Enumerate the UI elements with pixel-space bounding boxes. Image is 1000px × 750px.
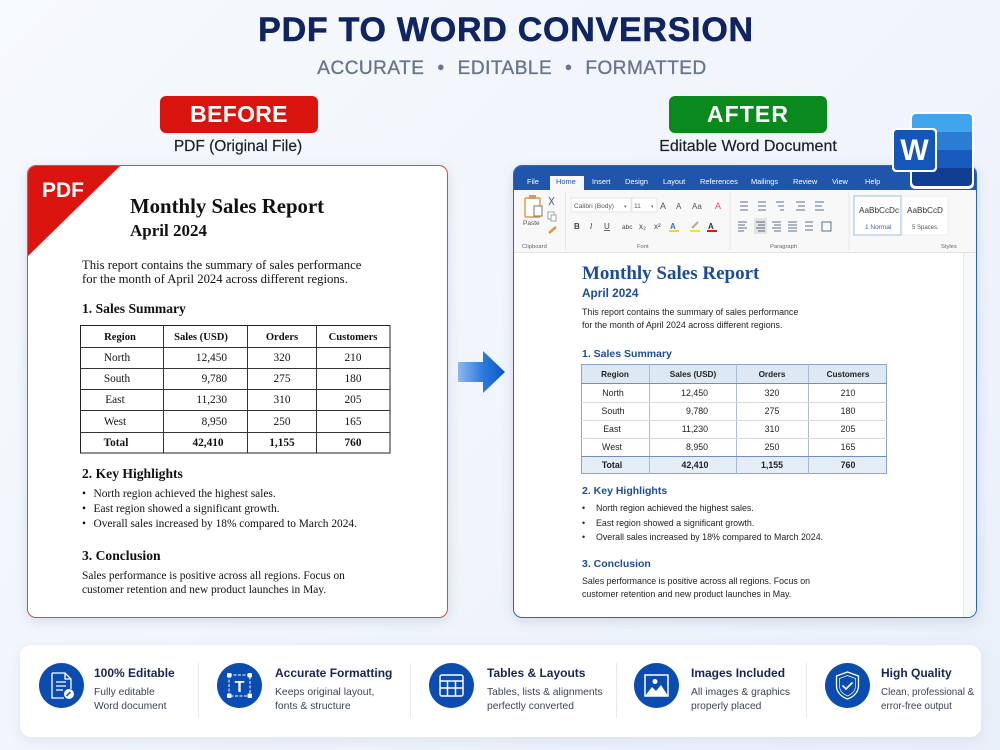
before badge: [160, 96, 318, 133]
pdf table: 1,155: [269, 437, 295, 449]
home tab: [550, 176, 584, 190]
word table: 205: [841, 424, 855, 434]
word table: West: [602, 442, 622, 452]
arrow: [458, 351, 505, 393]
feature 3 text: perfectly converted: [487, 701, 574, 712]
pdf table: South: [104, 373, 131, 385]
word bullets: •: [582, 518, 585, 528]
feature 2 title: Accurate Formatting: [275, 666, 392, 680]
word table: 310: [765, 424, 779, 434]
paragraph controls: [738, 202, 831, 231]
pdf bullets: •: [82, 503, 86, 515]
icon: shield: [825, 663, 870, 708]
font selectors: A: [676, 202, 682, 211]
pdf date: April 2024: [130, 221, 207, 240]
word table: 320: [765, 388, 779, 398]
font selectors: ▾: [651, 204, 654, 210]
pdf table: 275: [274, 373, 291, 385]
feature 4 title: Images Included: [691, 666, 785, 680]
word table: 12,450: [681, 388, 708, 398]
style gallery: 5 Spaces.: [912, 225, 939, 231]
style gallery: 1 Normal: [865, 224, 892, 231]
subtitle: ACCURATE • EDITABLE • FORMATTED: [317, 58, 707, 79]
feature 3 text: [487, 687, 603, 712]
icon: word logo: [892, 112, 974, 189]
word heading: key highlights: 2. Key Highlights: [582, 485, 667, 497]
font formatting: x₂: [639, 222, 646, 231]
ribbon background: [514, 190, 976, 253]
text: Review: [793, 177, 817, 186]
pdf table: 205: [345, 394, 362, 406]
ribbon controls: Paragraph: [770, 244, 797, 250]
style gallery: Styles: [941, 244, 957, 250]
pdf conclusion text: [82, 570, 345, 596]
word table: Region: [601, 370, 629, 379]
style gallery: AaBbCcD: [907, 206, 943, 215]
feature 1 text: Fully editable: [94, 687, 155, 698]
feature 3 title: Tables & Layouts: [487, 666, 585, 680]
word table: 42,410: [682, 460, 709, 470]
style gallery: [854, 196, 957, 250]
word doc date: April 2024: [582, 286, 638, 300]
feature 4 text: All images & graphics: [691, 687, 790, 698]
word bullets: North region achieved the highest sales.: [596, 503, 754, 513]
pdf table: Sales (USD): [174, 332, 228, 343]
font formatting: [574, 222, 717, 250]
word conclusion text: Sales performance is positive across all regions. Focus on: [582, 576, 810, 586]
clipboard: [522, 195, 556, 250]
pdf label: PDF: [42, 179, 84, 202]
word table: 275: [765, 406, 779, 416]
pdf heading: key highlights: 2. Key Highlights: [82, 466, 183, 481]
pdf table: 210: [345, 352, 362, 364]
before caption: PDF (Original File): [174, 138, 302, 155]
pdf table: Orders: [266, 332, 298, 343]
icon: formatting: [217, 663, 262, 708]
word table: 210: [841, 388, 855, 398]
font formatting: A: [670, 222, 676, 231]
feature 2 text: fonts & structure: [275, 701, 351, 712]
word table: 9,780: [686, 406, 708, 416]
feature 5 text: Clean, professional &: [881, 687, 974, 698]
word table: 250: [765, 442, 779, 452]
word conclusion text: customer retention and new product launches in May.: [582, 589, 791, 599]
pdf table: 310: [274, 394, 291, 406]
font formatting: Font: [637, 244, 649, 250]
font formatting: U: [604, 222, 610, 231]
pdf table: 250: [274, 416, 291, 428]
icon: word logo: W: [900, 134, 929, 167]
pdf intro: [82, 258, 361, 286]
pdf bullets: •: [82, 518, 86, 530]
word table: Orders: [759, 370, 786, 379]
clipboard: Clipboard: [522, 244, 547, 250]
ribbon tabs: [527, 177, 880, 186]
pdf table: 12,450: [196, 352, 227, 364]
word heading: sales summary: 1. Sales Summary: [582, 348, 672, 360]
pdf table: 320: [274, 352, 291, 364]
pdf table: 180: [345, 373, 362, 385]
text: Layout: [663, 177, 685, 186]
pdf conclusion text: customer retention and new product launches in May.: [82, 584, 326, 596]
feature 2 text: [275, 687, 374, 712]
text: Design: [625, 177, 648, 186]
icon: formatting: T: [235, 679, 245, 696]
panel: pdf document: [27, 165, 448, 618]
panel: feature bar: [20, 645, 981, 737]
font selectors: 11: [634, 203, 641, 210]
pdf table: 760: [345, 437, 362, 449]
word title bar: [514, 166, 976, 190]
icon: table: [429, 663, 474, 708]
pdf table: 11,230: [196, 394, 227, 406]
text: Help: [865, 177, 880, 186]
word intro: for the month of April 2024 across different regions.: [582, 320, 782, 330]
word table: South: [602, 406, 625, 416]
word conclusion text: [582, 576, 810, 599]
feature 5 text: error-free output: [881, 701, 952, 712]
pdf heading: conclusion: 3. Conclusion: [82, 548, 161, 563]
pdf table: North: [104, 352, 131, 364]
panel: word window: [513, 165, 977, 618]
clipboard: Paste: [523, 220, 540, 227]
ribbon controls: [522, 192, 957, 250]
after badge: AFTER: [707, 101, 789, 127]
font selectors: A: [715, 201, 721, 211]
text: View: [832, 177, 848, 186]
word table: Total: [602, 460, 622, 470]
text: Mailings: [751, 177, 778, 186]
before badge: BEFORE: [190, 101, 288, 127]
pdf bullets: •: [82, 488, 86, 500]
font formatting: x²: [654, 222, 661, 231]
word table: 11,230: [682, 424, 708, 434]
font selectors: [571, 198, 721, 212]
pdf table: West: [104, 416, 127, 428]
pdf table: 9,780: [202, 373, 227, 385]
word bullets: East region showed a significant growth.: [596, 518, 754, 528]
text: References: [700, 177, 738, 186]
font formatting: abc: [622, 224, 633, 231]
font formatting: I: [590, 222, 593, 231]
feature 5 title: High Quality: [881, 666, 952, 680]
word bullets: Overall sales increased by 18% compared to March 2024.: [596, 532, 823, 542]
pdf table: [80, 325, 390, 454]
word table: 760: [841, 460, 855, 470]
after caption: Editable Word Document: [659, 138, 837, 155]
pdf bullets: East region showed a significant growth.: [94, 503, 280, 515]
word intro: This report contains the summary of sales performance: [582, 307, 798, 317]
word table: 165: [841, 442, 855, 452]
pdf bullets: [82, 488, 357, 530]
feature 1 text: Word document: [94, 701, 166, 712]
feature 5 text: [881, 687, 974, 712]
pdf table: Total: [104, 437, 128, 449]
title: PDF TO WORD CONVERSION: [258, 11, 754, 49]
pdf corner ribbon: [28, 166, 120, 256]
text: Home: [556, 177, 576, 186]
icon: image: [634, 663, 679, 708]
icon: editable: [39, 663, 84, 708]
word doc title: Monthly Sales Report: [582, 263, 759, 284]
pdf table: Region: [104, 332, 136, 343]
word table: [581, 364, 887, 474]
font formatting: B: [574, 222, 580, 231]
after badge: [669, 96, 827, 133]
feature 1 text: [94, 687, 166, 712]
font selectors: Aa: [692, 202, 702, 211]
word table: Customers: [827, 370, 870, 379]
word bullets: •: [582, 503, 585, 513]
pdf table: 42,410: [192, 437, 224, 449]
tab labels: [527, 177, 880, 186]
text: File: [527, 177, 539, 186]
font formatting: A: [708, 222, 714, 231]
pdf title: Monthly Sales Report: [130, 195, 324, 218]
word intro: [582, 307, 798, 330]
word table: North: [602, 388, 624, 398]
pdf intro: for the month of April 2024 across different regions.: [82, 272, 348, 286]
text: Insert: [592, 177, 610, 186]
pdf bullets: Overall sales increased by 18% compared to March 2024.: [94, 518, 357, 530]
pdf bullets: North region achieved the highest sales.: [94, 488, 276, 500]
pdf heading: sales summary: 1. Sales Summary: [82, 301, 186, 316]
word table: 180: [841, 406, 855, 416]
feature 4 text: [691, 687, 790, 712]
feature 3 text: Tables, lists & alignments: [487, 687, 603, 698]
word bullets: [582, 503, 823, 542]
word bullets: •: [582, 532, 585, 542]
scrollbar: [963, 253, 977, 618]
feature 2 text: Keeps original layout,: [275, 687, 374, 698]
pdf table: 165: [345, 416, 362, 428]
pdf intro: This report contains the summary of sales performance: [82, 258, 361, 272]
font selectors: A: [660, 201, 666, 211]
word table: 1,155: [761, 460, 783, 470]
word table: Sales (USD): [670, 370, 716, 379]
pdf table: 8,950: [202, 416, 227, 428]
word heading: conclusion: 3. Conclusion: [582, 558, 651, 570]
font selectors: ▾: [624, 204, 627, 210]
word table: East: [603, 424, 621, 434]
feature 1 title: 100% Editable: [94, 666, 175, 680]
pdf table: Customers: [329, 332, 377, 343]
font selectors: Calibri (Body): [574, 203, 614, 210]
word table: 8,950: [686, 442, 708, 452]
feature 4 text: properly placed: [691, 701, 761, 712]
pdf table: East: [105, 394, 126, 406]
pdf conclusion text: Sales performance is positive across all regions. Focus on: [82, 570, 345, 582]
style gallery: AaBbCcDc: [859, 206, 899, 215]
